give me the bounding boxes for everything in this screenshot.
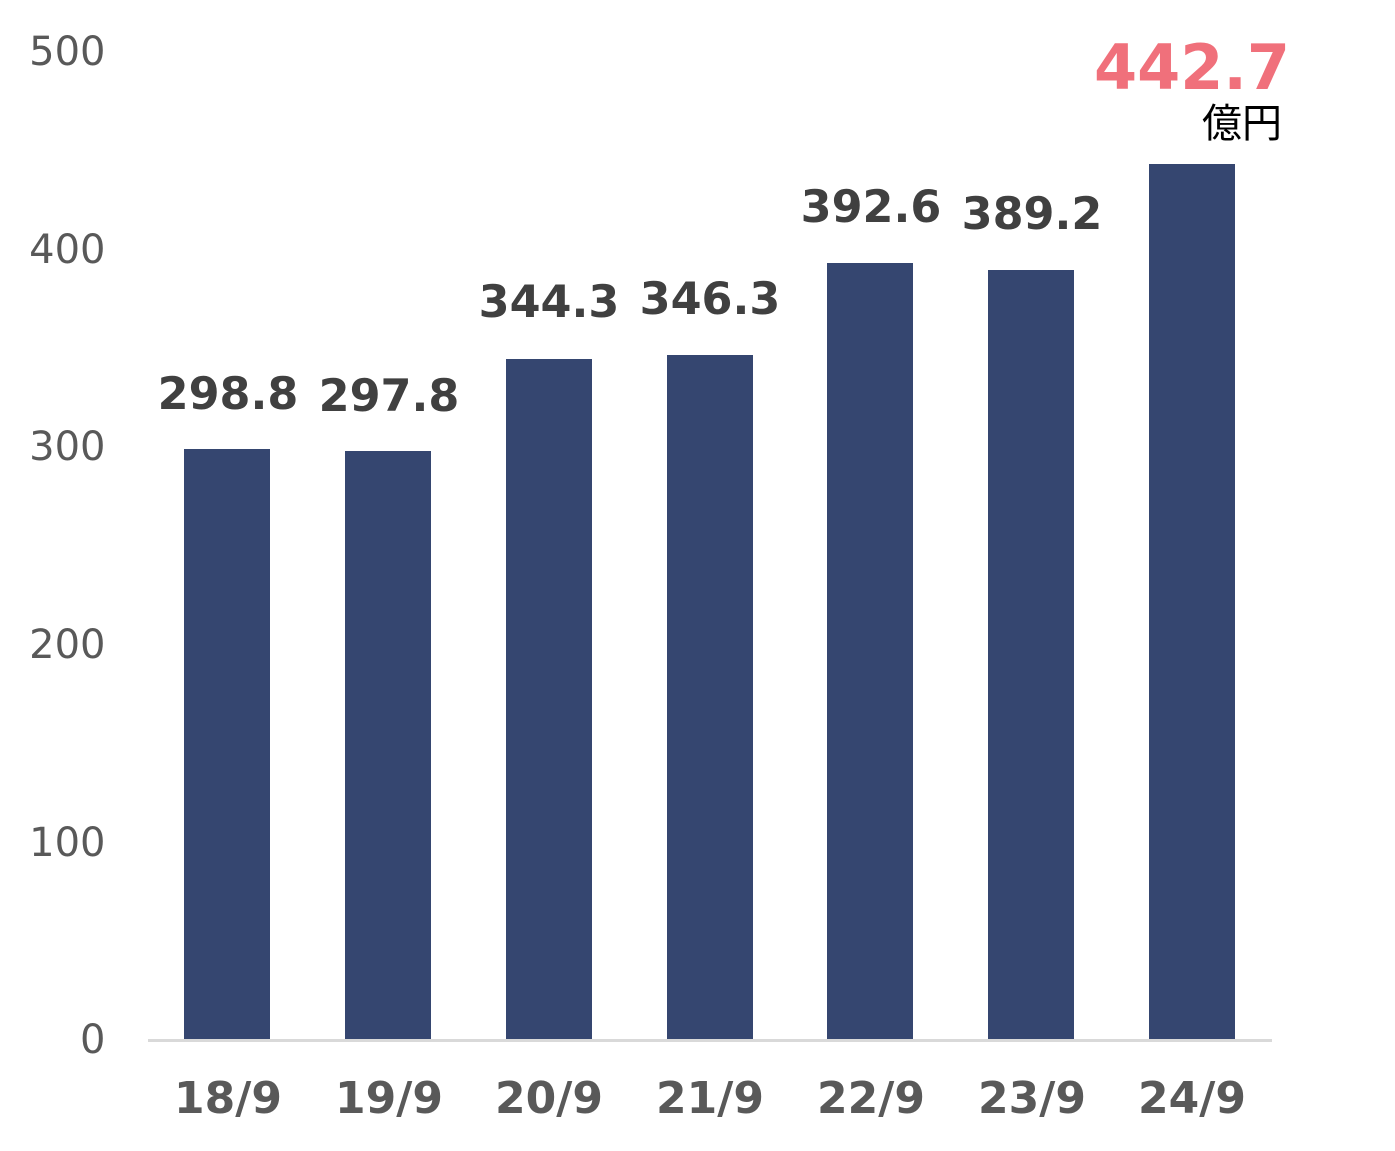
- x axis labels: 19/9: [335, 1073, 443, 1124]
- x axis labels: 20/9: [495, 1073, 603, 1124]
- y axis labels: 300: [29, 424, 106, 470]
- y axis labels: 500: [29, 29, 106, 75]
- x axis line: [148, 1039, 1272, 1042]
- x axis labels: 23/9: [978, 1073, 1086, 1124]
- value labels: 298.8: [158, 369, 298, 420]
- unit label: 億円: [1202, 91, 1282, 149]
- x axis labels: 22/9: [817, 1073, 925, 1124]
- y axis labels: 200: [29, 622, 106, 668]
- y axis labels: 100: [29, 820, 106, 866]
- x axis labels: 24/9: [1138, 1073, 1246, 1124]
- x axis labels: 21/9: [656, 1073, 764, 1124]
- value labels: 389.2: [962, 189, 1102, 240]
- highlighted value: 442.7: [1094, 31, 1290, 104]
- bars: [184, 164, 1235, 1040]
- value labels: 346.3: [640, 274, 780, 325]
- value labels: [158, 182, 1102, 422]
- value labels: 392.6: [801, 182, 941, 233]
- y axis labels: 400: [29, 227, 106, 273]
- y axis labels: [29, 29, 106, 1063]
- y axis labels: 0: [80, 1017, 106, 1063]
- x axis labels: 18/9: [174, 1073, 282, 1124]
- x axis labels: [174, 1073, 1246, 1124]
- value labels: 297.8: [319, 371, 459, 422]
- value labels: 344.3: [479, 277, 619, 328]
